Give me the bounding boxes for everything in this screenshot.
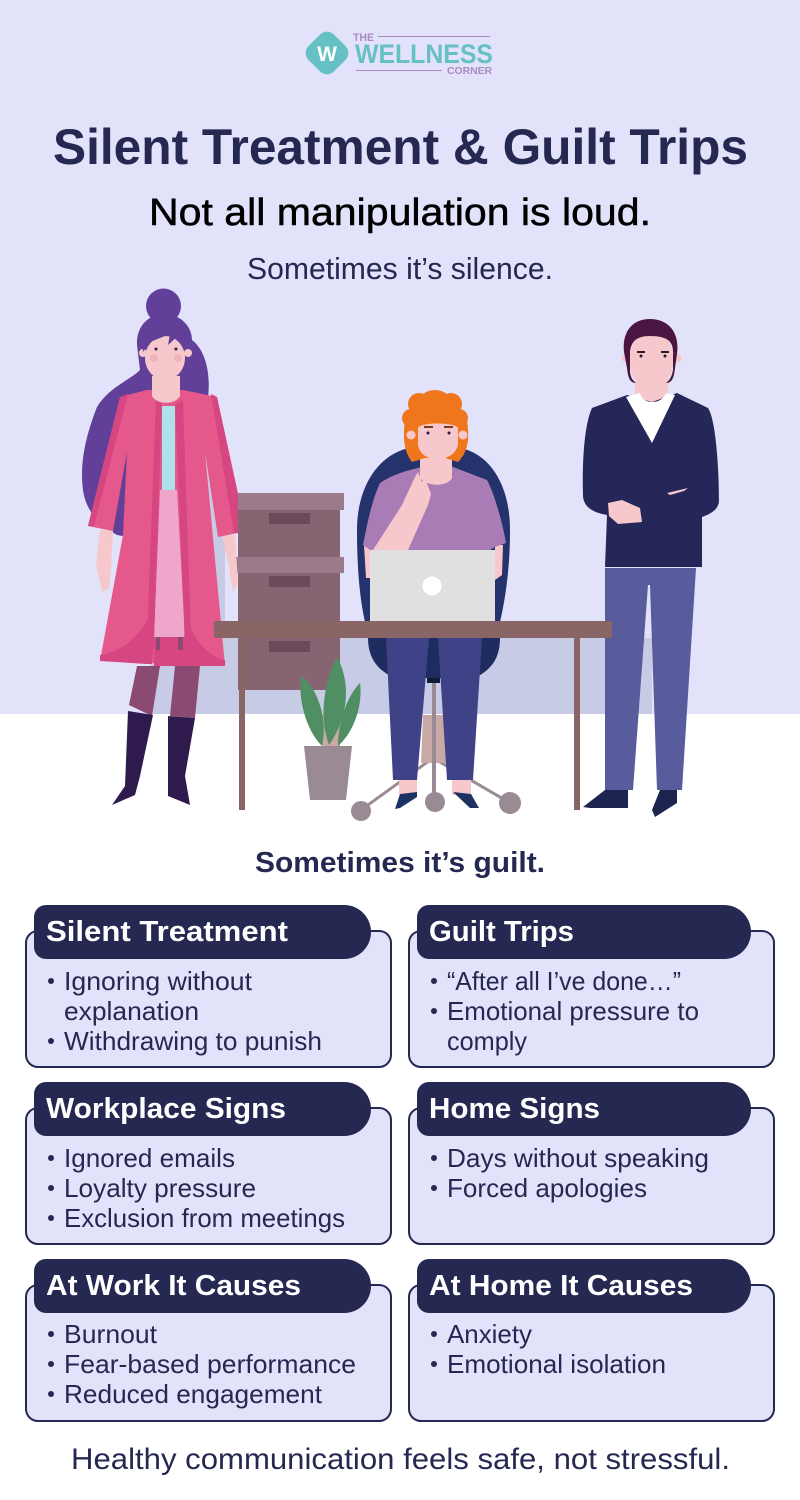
panel: home signs: Days without speaking: [447, 1143, 709, 1173]
illustration: desk: [214, 621, 612, 810]
background wall: [0, 0, 800, 714]
panel: workplace signs: [26, 1082, 391, 1244]
panel: home signs: [409, 1082, 774, 1244]
panel: guilt trips: comply: [447, 1026, 527, 1056]
panel: guilt trips: [409, 905, 774, 1067]
panel: at work it causes: [26, 1259, 391, 1421]
panel: home signs: Forced apologies: [447, 1173, 647, 1203]
panel: silent treatment: Ignoring without: [64, 966, 253, 996]
panel: at home it causes: [409, 1259, 774, 1421]
panel: silent treatment: explanation: [64, 996, 199, 1026]
panel: silent treatment: [26, 905, 391, 1067]
title: Silent Treatment & Guilt Trips: [53, 119, 748, 175]
illustration: laptop: [370, 550, 495, 622]
logo: [302, 28, 493, 78]
logo: W: [317, 43, 337, 66]
tagline: silence: Sometimes it’s silence.: [247, 251, 553, 286]
panel: at home it causes: Anxiety: [447, 1319, 532, 1349]
illustration: potted plant: [300, 657, 361, 800]
illustration: office chair: [351, 447, 521, 821]
panel: silent treatment: Silent Treatment: [46, 916, 288, 948]
panel: at work it causes: Fear-based performance: [64, 1349, 356, 1379]
floor shadow band: [150, 452, 652, 714]
panel: guilt trips: Emotional pressure to: [447, 996, 699, 1026]
panel: guilt trips: Guilt Trips: [429, 916, 574, 948]
panel: at work it causes: At Work It Causes: [46, 1270, 301, 1302]
panel: at work it causes: Burnout: [64, 1319, 158, 1349]
panel: at work it causes: Reduced engagement: [64, 1379, 323, 1409]
footer message: Healthy communication feels safe, not stressful.: [71, 1443, 730, 1476]
panel: at home it causes: At Home It Causes: [429, 1270, 693, 1302]
illustration: man standing: [583, 319, 719, 817]
illustration: woman standing: [82, 288, 238, 805]
panel: workplace signs: Exclusion from meetings: [64, 1203, 345, 1233]
panel: workplace signs: Ignored emails: [64, 1143, 235, 1173]
illustration: seated person: [363, 390, 506, 809]
logo: THE: [353, 32, 374, 44]
illustration: file boxes: [235, 493, 344, 690]
panel: at home it causes: Emotional isolation: [447, 1349, 666, 1379]
tagline: guilt: Sometimes it’s guilt.: [255, 847, 545, 879]
panel: silent treatment: Withdrawing to punish: [64, 1026, 322, 1056]
subtitle: Not all manipulation is loud.: [149, 192, 651, 234]
panel: workplace signs: Loyalty pressure: [64, 1173, 256, 1203]
panel: workplace signs: Workplace Signs: [46, 1093, 286, 1125]
panel: guilt trips: “After all I’ve done…”: [447, 966, 681, 996]
panel: home signs: Home Signs: [429, 1093, 600, 1125]
logo: CORNER: [447, 66, 493, 77]
logo: WELLNESS: [355, 39, 493, 69]
